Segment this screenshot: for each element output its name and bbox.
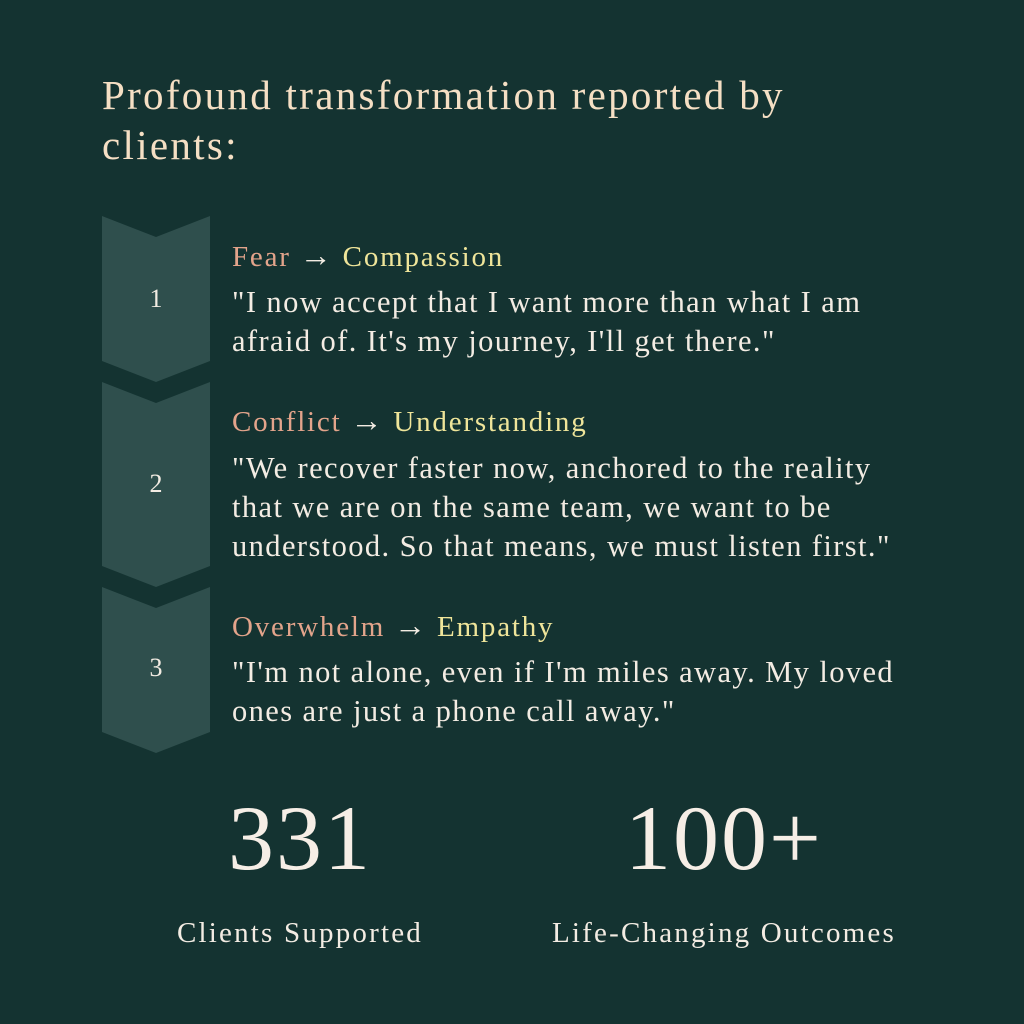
title: clients: — [102, 122, 239, 168]
number 2: 2 — [150, 469, 162, 498]
stat 2: Life-Changing Outcomes — [552, 917, 896, 949]
stat 1: 331 — [228, 787, 372, 889]
number 1: 1 — [150, 284, 162, 313]
number 3: 3 — [150, 653, 162, 682]
quote 2: "We recover faster now, anchored to the reality that we are on the same team, we want to be understood. So that means, we must listen first." — [232, 451, 891, 563]
stat 2: 100+ — [625, 787, 823, 889]
stat 2 — [552, 787, 896, 949]
quote 3: "I'm not alone, even if I'm miles away. My loved ones are just a phone call away." — [232, 655, 894, 728]
chevron 2 — [102, 382, 210, 587]
heading 3: Overwhelm → Empathy — [232, 607, 554, 643]
heading 1: Fear → Compassion — [232, 237, 504, 273]
stat 1 — [177, 787, 423, 949]
chevron 1 — [102, 216, 210, 382]
heading 2: Conflict → Understanding — [232, 402, 588, 438]
title: Profound transformation reported by — [102, 72, 785, 118]
title — [102, 72, 785, 168]
quote 1: "I now accept that I want more than what I am afraid of. It's my journey, I'll get there." — [232, 285, 861, 358]
chevron 3 — [102, 587, 210, 753]
stat 1: Clients Supported — [177, 917, 423, 949]
